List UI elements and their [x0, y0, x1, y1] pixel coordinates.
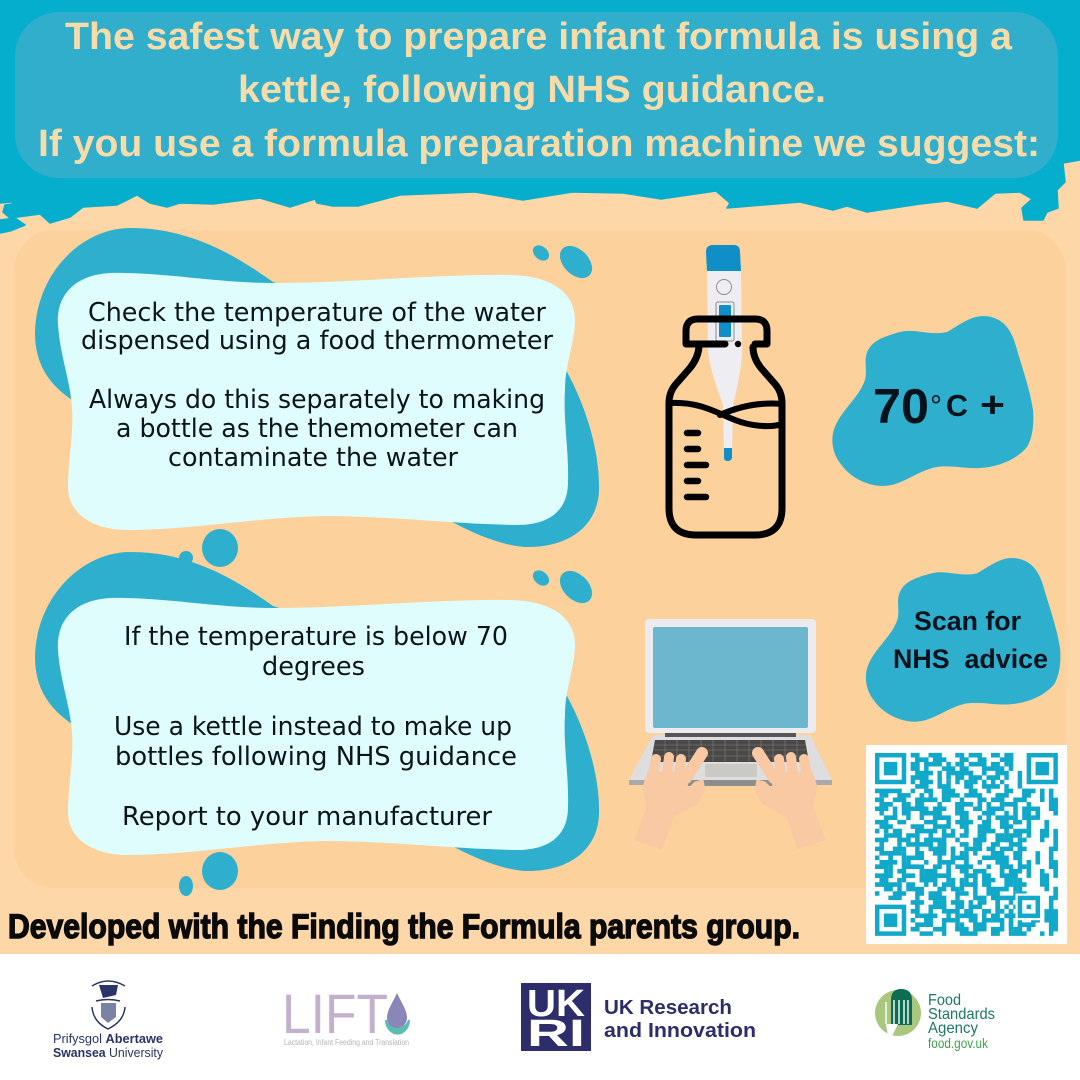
blob and droplets	[35, 529, 599, 896]
title text: kettle, following NHS guidance.	[238, 69, 826, 111]
logo: UKRI: UK	[527, 983, 586, 1025]
laptop base	[629, 735, 832, 785]
logo: Food Standards Agency: food.gov.uk	[928, 1035, 989, 1051]
badge: 70C plus: +	[980, 384, 1005, 425]
logo: Swansea University	[53, 981, 164, 1060]
logo: Food Standards Agency: Food	[928, 992, 961, 1009]
laptop lid and screen	[645, 619, 816, 733]
blob and droplets	[35, 228, 599, 547]
badge: scan for NHS advice: NHS advice	[893, 644, 1048, 674]
badge: 70C plus: °	[930, 390, 942, 423]
bottle outline	[669, 319, 782, 535]
torn teal header band	[0, 0, 1080, 233]
logo: UKRI	[521, 983, 756, 1055]
panel: check temperature callout	[35, 228, 599, 547]
logo: Swansea University: Swansea University	[53, 1046, 164, 1060]
QR code	[866, 745, 1067, 944]
credit line: Developed with the Finding the Formula parents group.	[8, 908, 800, 946]
below 70 advice text: bottles following NHS guidance	[115, 742, 517, 772]
badge: scan for NHS advice	[866, 558, 1060, 722]
temperature advice text: Always do this separately to making	[89, 385, 545, 415]
title text: If you use a formula preparation machine we suggest:	[38, 123, 1040, 165]
right hand	[755, 753, 825, 849]
title text	[38, 16, 1040, 165]
icon: laptop with typing hands	[629, 619, 832, 849]
logo: Food Standards Agency: Standards	[928, 1006, 995, 1023]
below 70 advice text: Report to your manufacturer	[122, 802, 492, 832]
below 70 advice text: Use a kettle instead to make up	[114, 712, 512, 742]
logo: UKRI: and Innovation	[604, 1020, 756, 1042]
thermometer	[706, 245, 742, 461]
text bubble	[58, 273, 575, 530]
temperature advice text: Check the temperature of the water	[88, 298, 546, 328]
panel: below 70 degrees callout	[35, 529, 599, 896]
footer logo strip	[0, 954, 1080, 1080]
header panel with title	[15, 12, 1058, 178]
below 70 advice text: degrees	[262, 652, 365, 682]
logo: UKRI: UK Research	[604, 997, 732, 1019]
temperature advice text: dispensed using a food thermometer	[81, 326, 553, 356]
temperature advice text: a bottle as the themometer can	[116, 414, 518, 444]
temperature advice text: contaminate the water	[168, 443, 458, 473]
below 70 advice text: If the temperature is below 70	[124, 622, 508, 652]
logo: Swansea University: Prifysgol Abertawe	[53, 1032, 163, 1046]
text bubble	[58, 598, 575, 855]
keyboard	[651, 740, 809, 762]
badge: 70C plus	[832, 316, 1033, 486]
logo: Food Standards Agency: Agency	[928, 1020, 978, 1037]
logo: Food Standards Agency	[875, 989, 995, 1051]
touchpad	[705, 764, 757, 777]
badge: 70C plus: 70	[873, 380, 929, 434]
title text: The safest way to prepare infant formula is using a	[65, 16, 1013, 58]
temperature advice text	[81, 298, 553, 473]
logo: UKRI: RI	[527, 1013, 585, 1055]
below 70 advice text	[114, 622, 517, 832]
badge: scan for NHS advice: Scan for	[914, 606, 1021, 636]
alignment pattern	[1015, 893, 1042, 920]
logo: LIFT: LIFT	[282, 982, 388, 1045]
badge: 70C plus: C	[946, 388, 968, 423]
inner panel	[14, 230, 1066, 888]
left hand	[635, 753, 705, 849]
icon: thermometer in bottle	[669, 245, 782, 535]
logo: LIFT: Lactation, Infant Feeding and Translation	[284, 1038, 409, 1047]
